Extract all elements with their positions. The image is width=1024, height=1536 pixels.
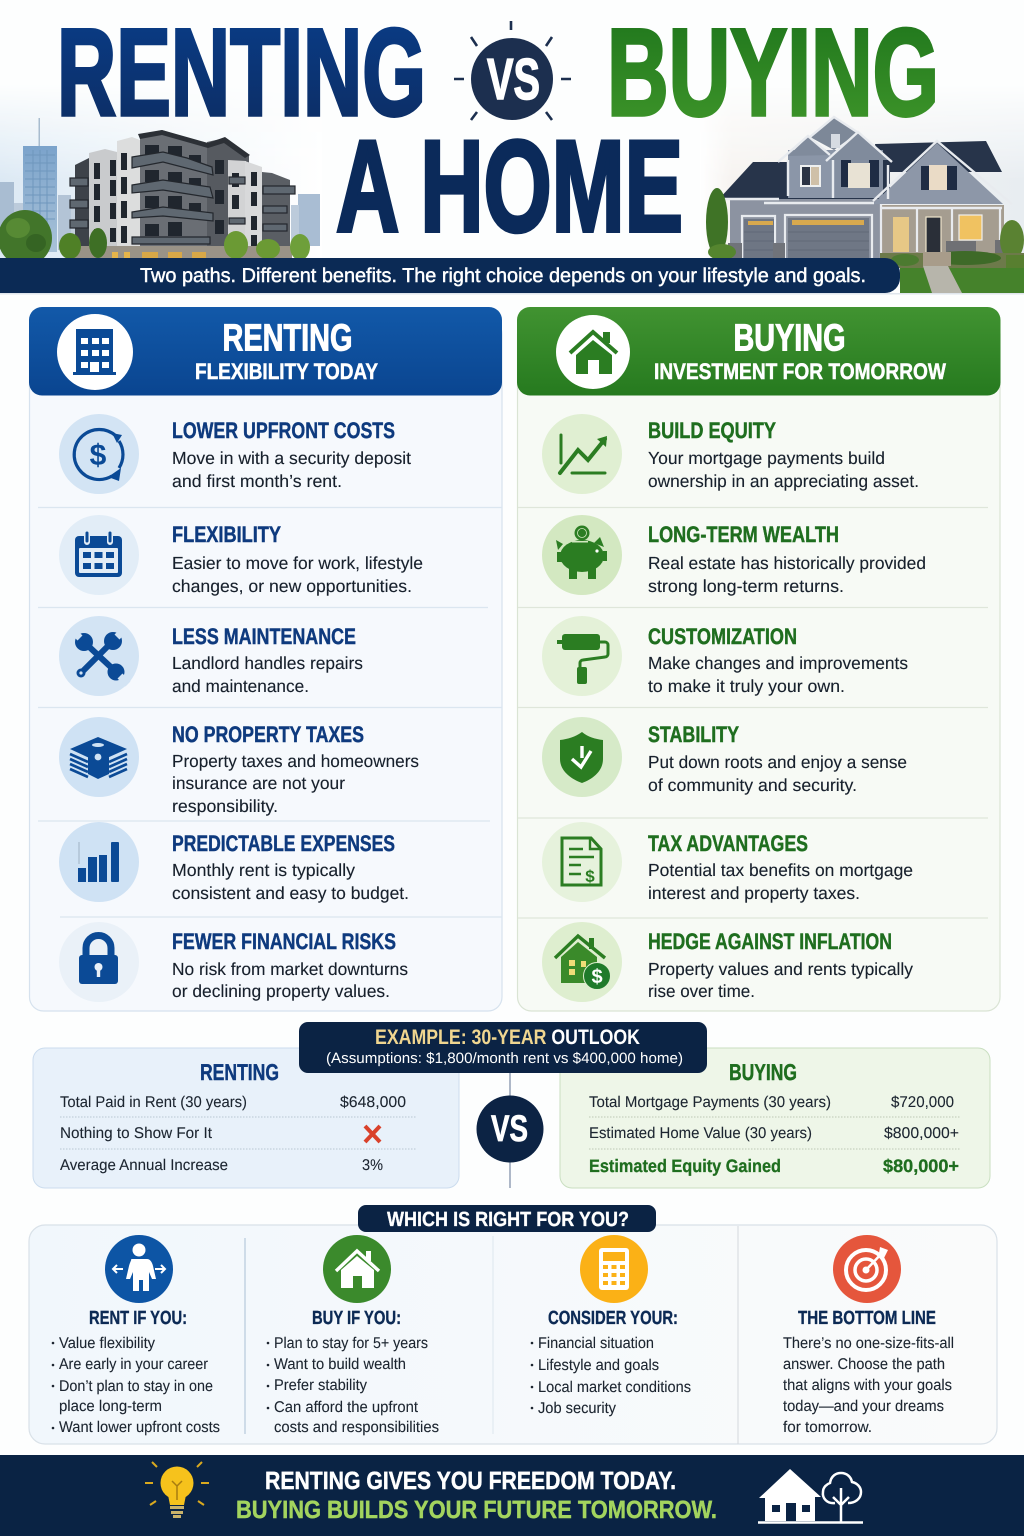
icon: calendar <box>59 515 139 595</box>
description: Property values and rents typically <box>648 959 913 979</box>
row: nothing to show: Nothing to Show For It <box>60 1125 213 1142</box>
heading: CONSIDER YOUR: <box>548 1308 678 1329</box>
paragraph: for tomorrow. <box>783 1419 872 1436</box>
row: total paid <box>60 1094 406 1111</box>
description <box>648 860 913 903</box>
description: rise over time. <box>648 981 755 1001</box>
icon: growth chart <box>542 414 622 494</box>
house windows and doors <box>728 134 1007 258</box>
buying header <box>517 307 1000 396</box>
house garden <box>706 188 728 256</box>
icon: crossed wrenches <box>59 616 139 696</box>
description: insurance are not your <box>172 773 345 793</box>
house trim <box>719 117 1012 258</box>
item: customization <box>542 616 908 696</box>
description: Move in with a security deposit <box>172 448 411 468</box>
heading: FLEXIBILITY <box>172 522 281 547</box>
icon: apartment building <box>57 314 133 390</box>
icon: house <box>323 1235 391 1303</box>
section: which is right for you <box>29 1205 997 1444</box>
item: less maintenance <box>59 616 363 696</box>
list: place long-term <box>59 1398 162 1415</box>
icon: light bulb <box>145 1462 209 1518</box>
item: lower upfront costs <box>59 414 411 494</box>
row: equity gained: $80,000+ <box>883 1156 959 1176</box>
heading: THE BOTTOM LINE <box>798 1308 936 1329</box>
badge: vs <box>454 21 571 120</box>
title: renting: RENTING <box>57 4 426 142</box>
item: fewer financial risks <box>59 922 408 1002</box>
icon: red x <box>365 1126 380 1142</box>
illustration: suburban house <box>706 117 1024 293</box>
subtitle bar <box>0 258 1024 294</box>
heading: FEWER FINANCIAL RISKS <box>172 929 396 954</box>
row: mortgage payments: Total Mortgage Payments (30 years) <box>589 1094 831 1111</box>
description <box>172 653 363 696</box>
heading: renting: RENTING <box>222 318 352 360</box>
item: flexibility <box>59 515 423 596</box>
description <box>648 448 919 491</box>
description: Potential tax benefits on mortgage <box>648 860 913 880</box>
heading: HEDGE AGAINST INFLATION <box>648 929 892 954</box>
heading: LONG-TERM WEALTH <box>648 522 839 547</box>
icon: target <box>833 1235 901 1303</box>
closing statement: BUYING BUILDS YOUR FUTURE TOMORROW. <box>236 1496 717 1524</box>
row: average increase: Average Annual Increase <box>60 1157 228 1174</box>
heading: RENTING <box>200 1059 279 1085</box>
heading: LESS MAINTENANCE <box>172 624 356 649</box>
description: consistent and easy to budget. <box>172 883 409 903</box>
icon: bar chart <box>59 822 139 902</box>
column: buy if you <box>267 1235 439 1436</box>
row: average increase: 3% <box>362 1157 383 1174</box>
description: interest and property taxes. <box>648 883 860 903</box>
paragraph: today—and your dreams <box>783 1398 944 1415</box>
description <box>172 553 423 596</box>
item: long-term wealth <box>542 515 926 596</box>
item: hedge against inflation <box>542 922 913 1002</box>
heading: CUSTOMIZATION <box>648 624 797 649</box>
building balconies <box>70 152 295 244</box>
list: Can afford the upfront <box>274 1399 419 1416</box>
description: and first month’s rent. <box>172 471 342 491</box>
description <box>172 959 408 1001</box>
list <box>52 1335 220 1436</box>
description: Property taxes and homeowners <box>172 751 419 771</box>
list <box>267 1335 439 1436</box>
sky background left <box>0 107 150 258</box>
panel: buying outlook <box>560 1048 990 1188</box>
description: Make changes and improvements <box>648 653 908 673</box>
list: Want to build wealth <box>274 1356 406 1373</box>
description: Your mortgage payments build <box>648 448 885 468</box>
panel: renting <box>29 307 502 1011</box>
icon: stack of money <box>59 717 139 797</box>
row: home value: $800,000+ <box>884 1125 959 1142</box>
icon: tax document <box>542 822 622 902</box>
description: Monthly rent is typically <box>172 860 355 880</box>
heading: buying: BUYING <box>734 318 846 360</box>
item: no property taxes <box>59 717 419 816</box>
paragraph <box>783 1335 954 1436</box>
description: or declining property values. <box>172 981 390 1001</box>
description: to make it truly your own. <box>648 676 845 696</box>
building windows <box>94 145 257 247</box>
house garage doors <box>744 219 774 258</box>
sky background right <box>720 124 1024 253</box>
row: equity gained <box>589 1156 959 1176</box>
icon: padlock <box>59 922 139 1002</box>
description: and maintenance. <box>172 676 309 696</box>
description: of community and security. <box>648 775 857 795</box>
section: 30-year outlook comparison <box>33 1022 990 1188</box>
row: average increase <box>60 1157 383 1174</box>
list: Value flexibility <box>59 1335 155 1352</box>
subheading: flexibility today: FLEXIBILITY TODAY <box>195 359 378 384</box>
icon: house with coin: $ <box>591 966 603 988</box>
item: tax advantages <box>542 822 913 903</box>
column: consider your <box>531 1235 691 1417</box>
icon: piggy bank <box>542 515 622 595</box>
icon: house <box>556 315 630 389</box>
illustration: trees left <box>0 210 310 266</box>
icon: paint roller <box>542 616 622 696</box>
paragraph: answer. Choose the path <box>783 1356 945 1373</box>
banner: example outlook: (Assumptions: $1,800/month rent vs $400,000 home) <box>326 1050 683 1067</box>
paragraph: There’s no one-size-fits-all <box>783 1335 954 1352</box>
list: Plan to stay for 5+ years <box>274 1335 428 1352</box>
heading: NO PROPERTY TAXES <box>172 722 364 747</box>
vs divider <box>476 1073 544 1188</box>
heading: PREDICTABLE EXPENSES <box>172 831 395 856</box>
list: Are early in your career <box>59 1356 208 1373</box>
heading: RENT IF YOU: <box>89 1308 187 1329</box>
icon: tax document: $ <box>585 867 595 886</box>
description <box>172 448 411 491</box>
list: Local market conditions <box>538 1379 691 1396</box>
heading: BUY IF YOU: <box>312 1308 401 1329</box>
description: changes, or new opportunities. <box>172 576 412 596</box>
description <box>648 752 907 795</box>
column: rent if you <box>52 1235 220 1436</box>
title <box>57 4 939 259</box>
vs divider: VS <box>491 1108 528 1149</box>
list: Job security <box>538 1400 616 1417</box>
description: strong long-term returns. <box>648 576 844 596</box>
description <box>648 653 908 696</box>
subtitle bar: Two paths. Different benefits. The right choice depends on your lifestyle and goals. <box>140 265 866 287</box>
icon: calculator <box>580 1235 648 1303</box>
column: the bottom line <box>783 1235 954 1436</box>
description <box>648 959 913 1001</box>
footer banner <box>0 1455 1024 1536</box>
closing statement <box>236 1467 717 1524</box>
list <box>531 1335 691 1417</box>
icon: shield with check <box>542 717 622 797</box>
description: Real estate has historically provided <box>648 553 926 573</box>
item: build equity <box>542 414 919 494</box>
title: a home: A HOME <box>336 113 683 259</box>
paragraph: that aligns with your goals <box>783 1377 952 1394</box>
row: nothing to show <box>60 1125 380 1142</box>
icon: person with arrows <box>105 1235 173 1303</box>
list: Prefer stability <box>274 1377 367 1394</box>
panel: renting outlook <box>33 1048 459 1188</box>
description <box>172 751 419 816</box>
panel: buying <box>517 307 1000 1011</box>
icon: dollar cycle: $ <box>90 439 107 472</box>
heading: BUYING <box>729 1059 797 1085</box>
icon: house with coin <box>542 922 622 1002</box>
subheading: investment for tomorrow: INVESTMENT FOR TOMORROW <box>654 359 947 384</box>
description: No risk from market downturns <box>172 959 408 979</box>
illustration: apartment building <box>70 130 295 258</box>
banner: which is right: WHICH IS RIGHT FOR YOU? <box>387 1208 629 1231</box>
list: Financial situation <box>538 1335 654 1352</box>
list: Don’t plan to stay in one <box>59 1378 213 1395</box>
item: stability <box>542 717 907 797</box>
list: Lifestyle and goals <box>538 1357 659 1374</box>
header section <box>0 107 1024 293</box>
item: predictable expenses <box>59 822 409 903</box>
row: total paid: $648,000 <box>340 1094 406 1111</box>
row: home value <box>589 1125 959 1142</box>
description: ownership in an appreciating asset. <box>648 471 919 491</box>
description: Easier to move for work, lifestyle <box>172 553 423 573</box>
row: home value: Estimated Home Value (30 years) <box>589 1125 812 1142</box>
description: Put down roots and enjoy a sense <box>648 752 907 772</box>
badge: vs: VS <box>487 47 540 112</box>
list: costs and responsibilities <box>274 1419 439 1436</box>
heading: LOWER UPFRONT COSTS <box>172 418 395 443</box>
row: mortgage payments: $720,000 <box>891 1094 954 1111</box>
description: responsibility. <box>172 796 278 816</box>
icon: dollar cycle <box>59 414 139 494</box>
heading: STABILITY <box>648 722 739 747</box>
icon: house and tree <box>758 1469 863 1522</box>
description: Landlord handles repairs <box>172 653 363 673</box>
row: total paid: Total Paid in Rent (30 years) <box>60 1094 247 1111</box>
renting header <box>29 307 502 396</box>
panel background <box>29 1225 997 1444</box>
closing statement: RENTING GIVES YOU FREEDOM TODAY. <box>265 1467 676 1495</box>
list: Want lower upfront costs <box>59 1419 220 1436</box>
description <box>172 860 409 903</box>
row: equity gained: Estimated Equity Gained <box>589 1156 781 1176</box>
panel body <box>30 320 502 1011</box>
panel body <box>518 320 1000 1011</box>
description <box>648 553 926 596</box>
heading: BUILD EQUITY <box>648 418 776 443</box>
row: mortgage payments <box>589 1094 954 1111</box>
banner: example outlook: EXAMPLE: 30-YEAR OUTLOOK <box>375 1026 640 1049</box>
banner: example outlook <box>299 1022 707 1073</box>
heading: TAX ADVANTAGES <box>648 831 808 856</box>
illustration: city skyline <box>0 118 320 252</box>
